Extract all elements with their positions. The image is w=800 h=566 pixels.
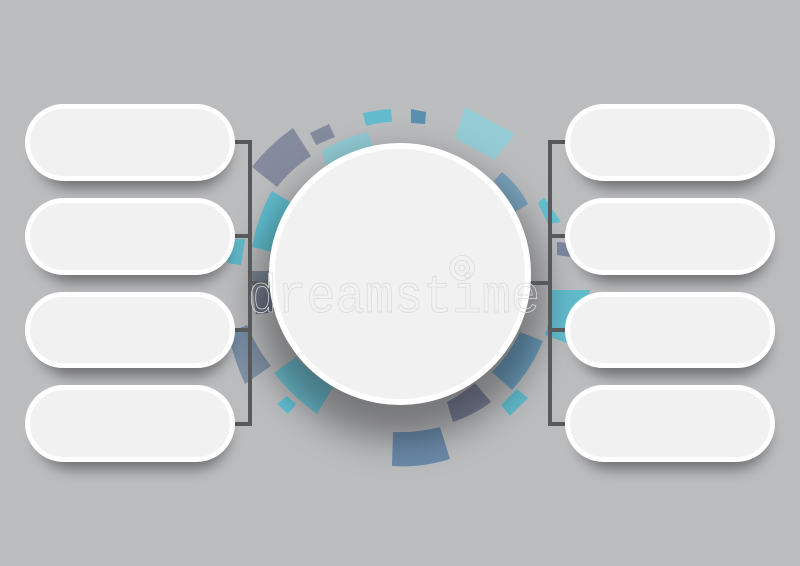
pill right 4 [568, 388, 772, 460]
segment: teal left [252, 191, 295, 252]
segment: slate left [252, 271, 280, 314]
segment: blue left behind line [228, 325, 271, 384]
segment: small teal lower right [501, 389, 528, 416]
segment: small teal behind pill [227, 239, 245, 265]
watermark spiral [450, 256, 474, 280]
connector lines [230, 142, 570, 424]
pill left 4 [28, 388, 232, 460]
segment: dark teal lower left [274, 357, 333, 414]
segment: small blue top [411, 109, 426, 124]
central circle [272, 146, 528, 402]
pill right 3 [568, 294, 772, 366]
pill shadows [37, 120, 769, 469]
right bracket [525, 142, 570, 424]
segment: blue bottom [392, 427, 450, 466]
ring of arc segments [227, 107, 590, 466]
pill left 3 [28, 294, 232, 366]
segment: large slate upper left [252, 128, 311, 187]
segment: small slate right [557, 242, 570, 257]
segment: small teal top [363, 109, 392, 126]
central circle shadow [255, 156, 545, 440]
watermark text: dreamstime [248, 268, 540, 329]
pill left 1 [28, 106, 232, 178]
segment: small slate [310, 124, 335, 145]
left bracket [230, 142, 275, 424]
segment: small teal right [538, 197, 561, 224]
segment: teal right behind pill [545, 290, 590, 346]
segment: small teal lower left [277, 396, 296, 414]
pill right 1 [568, 106, 772, 178]
left pills [28, 106, 232, 460]
segment: dark slate bottom [447, 383, 491, 422]
segment: blue lower right [492, 332, 543, 390]
segment: blue upper right [494, 172, 528, 212]
right pills [568, 106, 772, 460]
segment: large pale teal top right [455, 107, 515, 160]
segment: pale teal top left [322, 132, 372, 170]
pill left 2 [28, 200, 232, 272]
pill right 2 [568, 200, 772, 272]
watermark [248, 256, 540, 329]
